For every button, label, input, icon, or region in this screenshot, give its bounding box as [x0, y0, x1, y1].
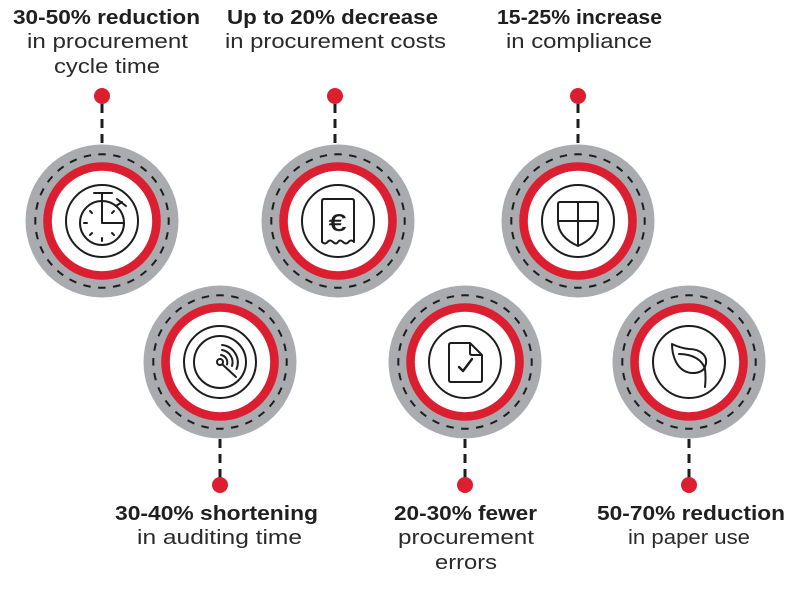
text: 20-30% fewer procurement errors: errors: [435, 552, 497, 574]
icon: leaf: [672, 344, 706, 387]
text: 50-70% reduction in paper use: 50-70% reduction: [597, 503, 785, 525]
badge: document check: [388, 286, 542, 438]
text: 15-25% increase in compliance: 15-25% increase: [497, 7, 662, 29]
connector: top left pin: [94, 88, 110, 144]
text: 30-50% reduction in procurement cycle time: in procurement: [27, 31, 189, 53]
icon: document check: [449, 343, 482, 382]
text: 30-40% shortening in auditing time: 30-40% shortening: [115, 503, 318, 525]
icon: shield: [558, 202, 598, 246]
text: Up to 20% decrease in procurement costs: in procurement costs: [225, 31, 446, 53]
connector: top right pin: [570, 88, 586, 144]
text: 20-30% fewer procurement errors: procurement: [398, 527, 535, 549]
badge: stopwatch: [26, 144, 178, 298]
text: Up to 20% decrease in procurement costs: Up to 20% decrease: [227, 7, 438, 29]
text: 30-40% shortening in auditing time: [115, 503, 318, 549]
text: 50-70% reduction in paper use: [597, 503, 785, 549]
connector: bottom left pin: [212, 439, 228, 493]
badge: shield: [502, 144, 654, 298]
text: 30-40% shortening in auditing time: in auditing time: [137, 527, 302, 549]
icon: euro receipt: [322, 199, 354, 244]
connector: top middle pin: [327, 88, 343, 144]
icon: radar: [194, 336, 246, 388]
icon: euro receipt: €: [329, 210, 347, 237]
text: Up to 20% decrease in procurement costs: [225, 7, 446, 53]
text: 30-50% reduction in procurement cycle time: [13, 7, 200, 78]
connector: bottom right pin: [681, 439, 697, 493]
icon: stopwatch: [80, 193, 126, 245]
text: 15-25% increase in compliance: in compliance: [506, 31, 652, 53]
text: 50-70% reduction in paper use: in paper use: [628, 527, 750, 549]
text: 20-30% fewer procurement errors: [394, 503, 537, 574]
text: 30-50% reduction in procurement cycle time: 30-50% reduction: [13, 7, 200, 29]
connector: bottom middle pin: [457, 439, 473, 493]
badge: leaf: [612, 286, 766, 438]
text: 30-50% reduction in procurement cycle time: cycle time: [54, 56, 160, 78]
badge: radar: [144, 286, 296, 438]
badge: euro receipt: [262, 144, 414, 298]
text: 20-30% fewer procurement errors: 20-30% fewer: [394, 503, 537, 525]
text: 15-25% increase in compliance: [497, 7, 662, 53]
